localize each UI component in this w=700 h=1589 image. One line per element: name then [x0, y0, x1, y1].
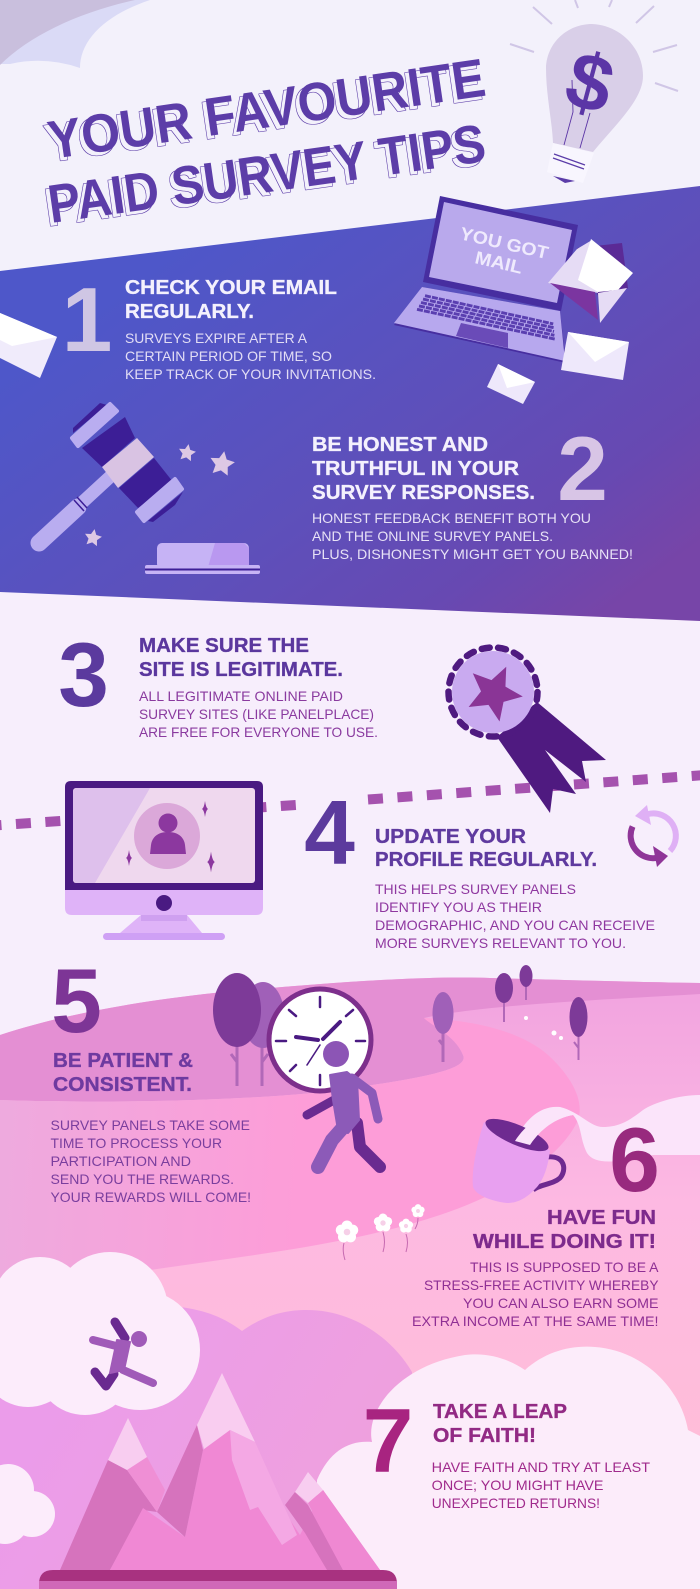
tip 4 heading: PROFILE REGULARLY.: [375, 848, 597, 871]
icon: gavel: [39, 403, 260, 574]
tip 1 heading: [125, 276, 337, 323]
tip 2 body: AND THE ONLINE SURVEY PANELS.: [312, 528, 553, 544]
icon: envelope left: [0, 313, 57, 378]
base platform: [39, 1570, 397, 1589]
landscape: road: [0, 1018, 580, 1290]
tip 4 body: [375, 881, 655, 951]
tip 3 body: ALL LEGITIMATE ONLINE PAID: [139, 688, 343, 704]
tip 6 body: YOU CAN ALSO EARN SOME: [463, 1295, 658, 1311]
cloud: small left: [0, 1464, 55, 1544]
tip 1 body: [125, 330, 376, 382]
tip 7 number: 7: [363, 1391, 413, 1492]
tip 6 number: 6: [609, 1110, 660, 1211]
tip 5 body: SEND YOU THE REWARDS.: [50, 1171, 234, 1187]
tip 5 body: [50, 1117, 251, 1205]
icon: open envelope: [548, 239, 633, 323]
icon: walking person: [307, 1041, 380, 1167]
tip 1 body: SURVEYS EXPIRE AFTER A: [125, 330, 308, 346]
title: YOUR FAVOURITE: [44, 48, 489, 171]
tip 3 heading: SITE IS LEGITIMATE.: [139, 658, 343, 681]
tip 5 heading: [53, 1049, 193, 1096]
tip 3 body: [139, 688, 378, 740]
tip 4 heading: [375, 825, 597, 871]
tip 7 body: UNEXPECTED RETURNS!: [432, 1495, 600, 1511]
tip 6 heading: [473, 1206, 656, 1253]
tip 4 body: MORE SURVEYS RELEVANT TO YOU.: [375, 935, 626, 951]
icon: coffee cup with steam: [473, 1095, 700, 1203]
icon: light bulb with dollar sign: $: [557, 34, 623, 131]
tip 1 body: KEEP TRACK OF YOUR INVITATIONS.: [125, 366, 376, 382]
tip 1 heading: CHECK YOUR EMAIL: [125, 276, 337, 299]
tip 5 body: YOUR REWARDS WILL COME!: [50, 1189, 251, 1205]
tip 7 heading: TAKE A LEAP: [433, 1400, 567, 1423]
tip 1 body: CERTAIN PERIOD OF TIME, SO: [125, 348, 332, 364]
landscape: trees: [213, 965, 588, 1086]
tip 7 heading: [433, 1400, 567, 1447]
background: lower page: [0, 500, 700, 1589]
tip 5 heading: BE PATIENT &: [53, 1049, 193, 1072]
landscape: right hillside: [0, 977, 700, 1589]
tip 4 heading: UPDATE YOUR: [375, 825, 526, 848]
icon: stars: [83, 443, 236, 547]
tip 6 body: [412, 1259, 659, 1329]
tip 5 heading: CONSISTENT.: [53, 1073, 192, 1096]
tip 7 body: [432, 1459, 650, 1511]
title: PAID SURVEY TIPS: [44, 113, 489, 235]
tip 2 body: PLUS, DISHONESTY MIGHT GET YOU BANNED!: [312, 546, 633, 562]
icon: award ribbon: [448, 648, 606, 813]
tip 2 heading: SURVEY RESPONSES.: [312, 481, 535, 504]
tip 2 heading: [312, 433, 535, 504]
background: header: [0, 0, 700, 400]
icon: clock: [269, 989, 371, 1091]
tip 4 body: THIS HELPS SURVEY PANELS: [375, 881, 576, 897]
tip 7 body: HAVE FAITH AND TRY AT LEAST: [432, 1459, 650, 1475]
landscape: dark hill: [0, 977, 700, 1102]
tip 2 body: HONEST FEEDBACK BENEFIT BOTH YOU: [312, 510, 591, 526]
tip 7 body: ONCE; YOU MIGHT HAVE: [432, 1477, 604, 1493]
tip 5 number: 5: [51, 951, 102, 1052]
tip 3 heading: MAKE SURE THE: [139, 634, 309, 657]
icon: jumping person: [93, 1322, 153, 1386]
panel: purple band: [0, 186, 700, 621]
tip 6 heading: HAVE FUN: [547, 1206, 656, 1229]
icon: flowers: [336, 1204, 425, 1260]
tip 6 heading: WHILE DOING IT!: [473, 1230, 656, 1253]
top-left corner cloud: [0, 0, 150, 68]
tip 6 body: EXTRA INCOME AT THE SAME TIME!: [412, 1313, 658, 1329]
tip 3 heading: [139, 634, 343, 681]
tip 2 heading: TRUTHFUL IN YOUR: [312, 457, 519, 480]
tip 4 body: DEMOGRAPHIC, AND YOU CAN RECEIVE: [375, 917, 655, 933]
landscape: purple hills: [0, 1303, 412, 1589]
icon: refresh arrows: [631, 805, 676, 867]
tip 5 body: SURVEY PANELS TAKE SOME: [50, 1117, 250, 1133]
tip 6 body: STRESS-FREE ACTIVITY WHEREBY: [424, 1277, 659, 1293]
tip 1 heading: REGULARLY.: [125, 300, 254, 323]
tip 1 number: 1: [62, 270, 112, 371]
tip 3 body: ARE FREE FOR EVERYONE TO USE.: [139, 724, 378, 740]
icon: laptop: YOU GOT: [458, 223, 550, 263]
icon: envelope middle: [561, 332, 629, 380]
tip 3 number: 3: [58, 625, 109, 726]
icon: computer monitor: [65, 781, 263, 940]
illustration: mountains: [60, 1373, 380, 1570]
cloud: bottom right: [317, 1347, 700, 1589]
tip 5 body: TIME TO PROCESS YOUR: [50, 1135, 222, 1151]
tip 2 body: [312, 510, 633, 562]
icon: laptop: MAIL: [473, 247, 524, 278]
icon: light bulb with dollar sign: [510, 0, 678, 183]
title: [44, 48, 489, 235]
tip 3 body: SURVEY SITES (LIKE PANELPLACE): [139, 706, 374, 722]
tip 4 body: IDENTIFY YOU AS THEIR: [375, 899, 542, 915]
cloud: left with jumper: [0, 1252, 200, 1415]
tip 7 heading: OF FAITH!: [433, 1424, 536, 1447]
icon: laptop: [394, 196, 578, 363]
tip 2 heading: BE HONEST AND: [312, 433, 488, 456]
tip 4 number: 4: [304, 783, 355, 884]
tip 2 number: 2: [557, 419, 608, 520]
tip 5 body: PARTICIPATION AND: [50, 1153, 191, 1169]
icon: envelope small: [487, 364, 535, 404]
dashed divider: [0, 775, 700, 826]
tip 6 body: THIS IS SUPPOSED TO BE A: [470, 1259, 659, 1275]
